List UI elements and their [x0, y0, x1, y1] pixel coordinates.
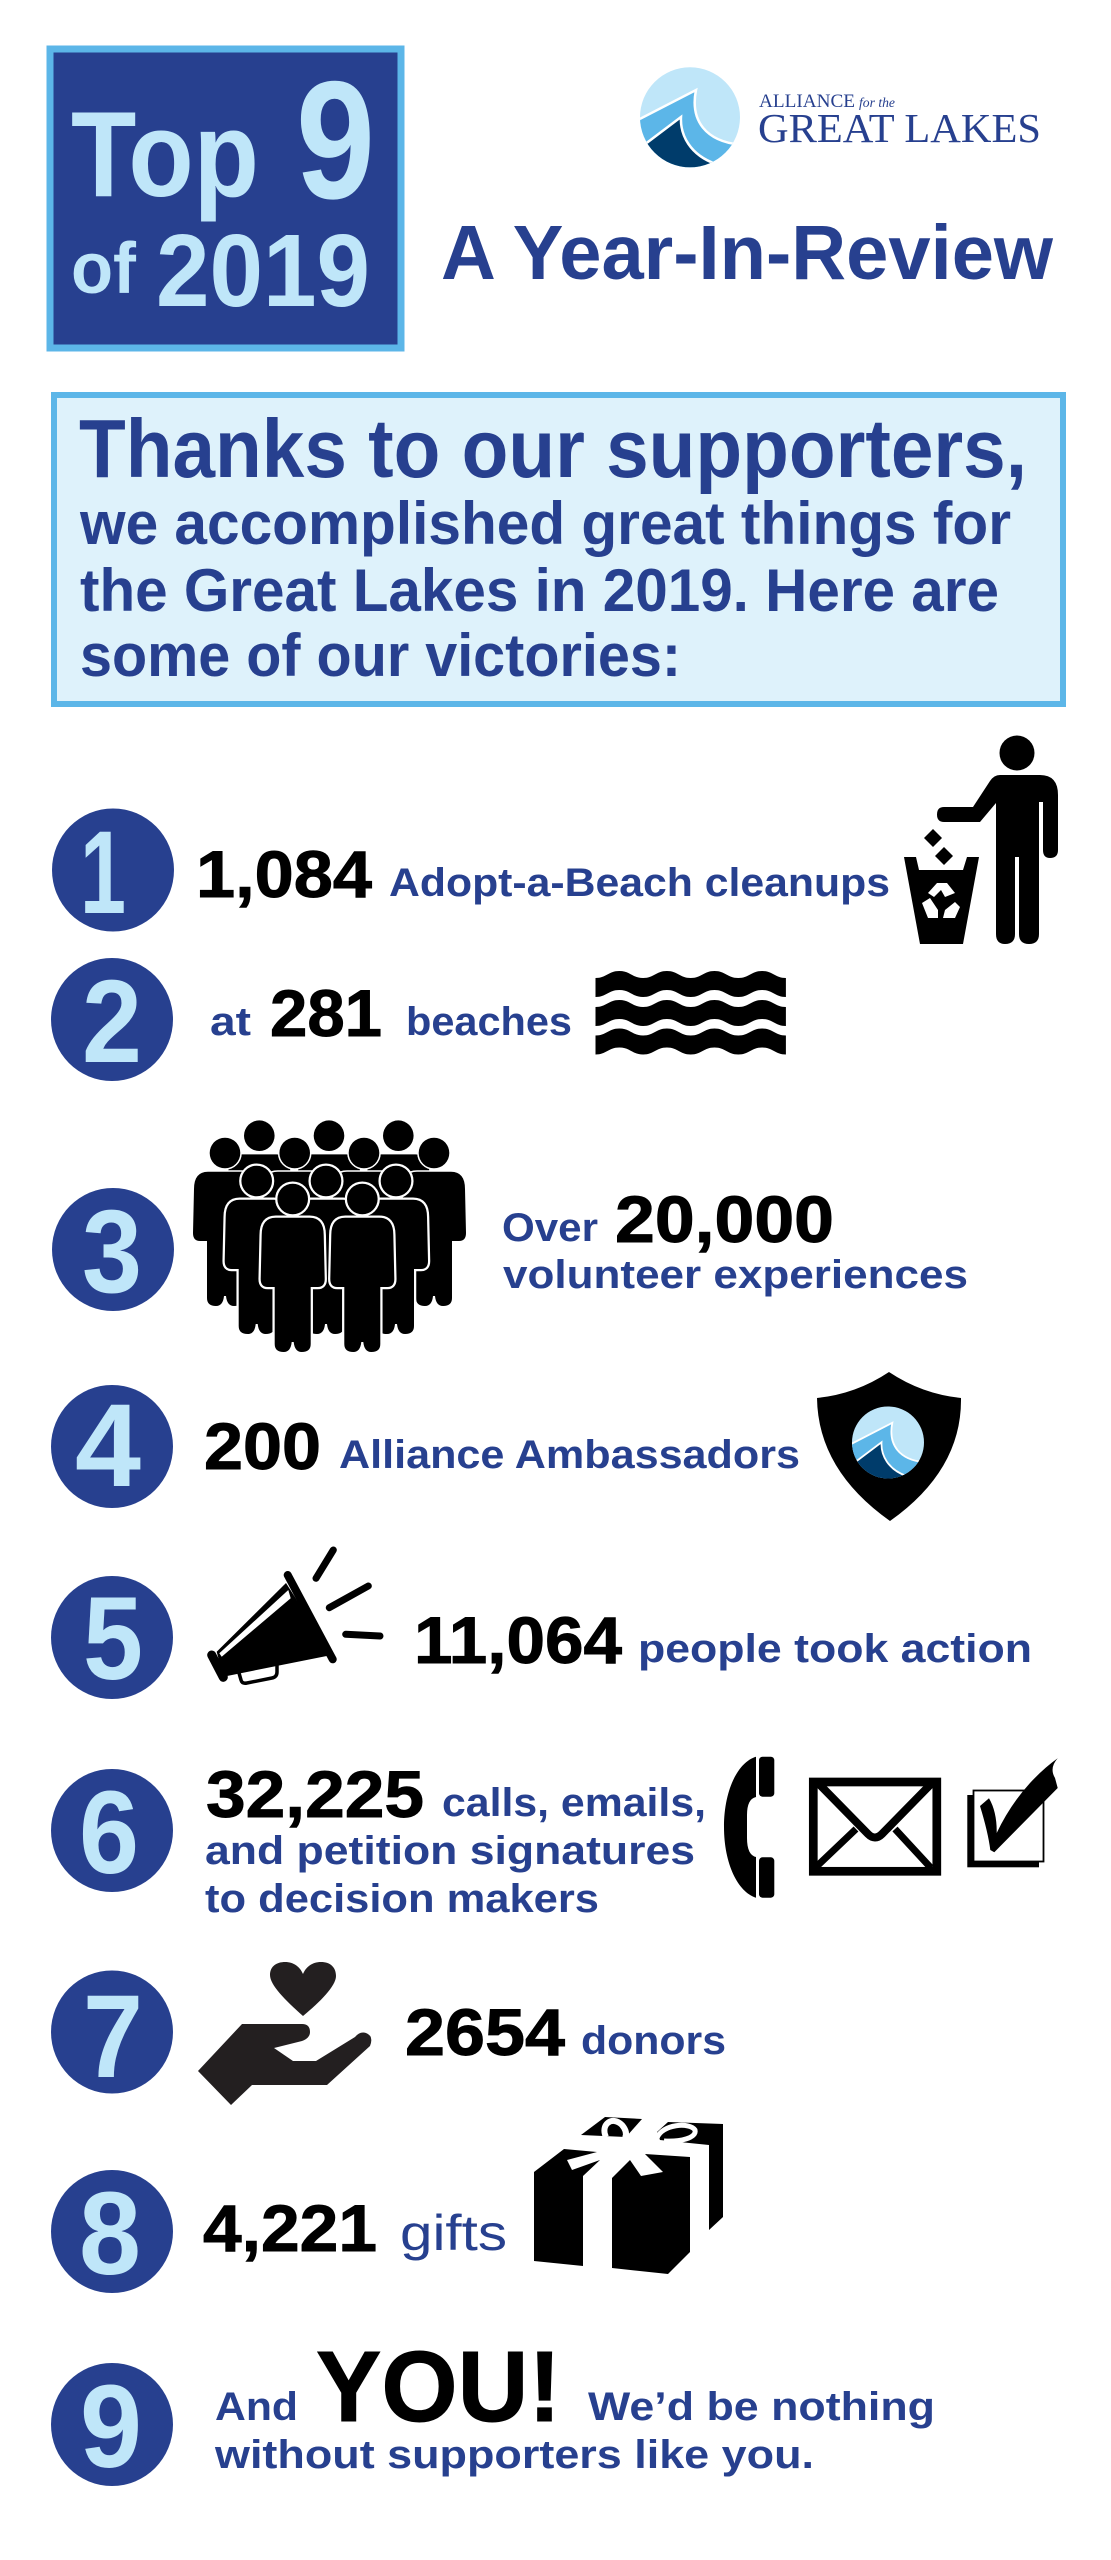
- item 8 text: 4,221 gifts: 4,221: [203, 2191, 377, 2265]
- item 4 badge: 4: [75, 1380, 141, 1512]
- item 3 text: Over 20,000 volunteer experiences: 20,000: [615, 1182, 834, 1256]
- icon: hand holding heart: [198, 1962, 371, 2105]
- item 9 badge: 9: [80, 2361, 142, 2493]
- item 2 badge: [51, 956, 173, 1088]
- item 3 badge: 3: [82, 1186, 142, 1318]
- item 9 text: And YOU! We'd be nothing without supporters like you.: [214, 2331, 935, 2477]
- item 8 text: 4,221 gifts: [203, 2191, 507, 2265]
- item 1 badge: 1: [80, 807, 126, 939]
- item 9 text: And YOU! We'd be nothing without supporters like you.: We’d be nothing: [588, 2385, 935, 2429]
- item 7 badge: 7: [83, 1971, 143, 2103]
- item 2 badge: 2: [82, 956, 142, 1088]
- panel: thanks to our supporters: we accomplished great things for: [79, 490, 1011, 557]
- item 5 badge: [51, 1573, 173, 1705]
- item 3 badge: [52, 1186, 174, 1318]
- item 9 text: And YOU! We'd be nothing without supporters like you.: without supporters like you.: [214, 2433, 814, 2477]
- item 4 text: 200 Alliance Ambassadors: 200: [204, 1409, 321, 1483]
- panel: thanks to our supporters: Thanks to our supporters,: [79, 402, 1027, 495]
- icon: group of volunteers: [193, 1120, 466, 1352]
- item 2 text: at 281 beaches: [210, 976, 572, 1050]
- item 6 text: 32,225 calls, emails, and petition signatures to decision makers: [205, 1757, 706, 1921]
- panel: thanks to our supporters: the Great Lakes in 2019. Here are: [80, 557, 999, 624]
- item 6 badge: [51, 1767, 173, 1899]
- item 9 text: And YOU! We'd be nothing without supporters like you.: YOU!: [316, 2331, 561, 2443]
- heading: A Year-In-Review: A Year-In-Review: [441, 210, 1054, 296]
- item 6 badge: 6: [79, 1767, 139, 1899]
- icon: telephone: [724, 1757, 774, 1898]
- item 5 badge: 5: [83, 1573, 143, 1705]
- panel: thanks to our supporters: [54, 395, 1063, 704]
- item 2 text: at 281 beaches: beaches: [406, 1000, 572, 1044]
- item 7 badge: [51, 1970, 173, 2103]
- item 9 badge: [51, 2361, 173, 2493]
- icon: megaphone: [212, 1550, 380, 1683]
- title box: Top 9 of 2019: 9: [296, 46, 375, 234]
- item 5 text: 11,064 people took action: 11,064: [414, 1603, 622, 1677]
- title box: Top 9 of 2019: of: [71, 229, 137, 309]
- item 3 text: Over 20,000 volunteer experiences: [502, 1182, 968, 1297]
- item 1 text: 1,084 Adopt-a-Beach cleanups: 1,084: [196, 837, 372, 911]
- item 7 text: 2654 donors: donors: [581, 2019, 726, 2063]
- item 1 badge: [52, 807, 174, 939]
- item 6 text: 32,225 calls, emails, and petition signatures to decision makers: 32,225: [206, 1757, 424, 1831]
- item 6 text: 32,225 calls, emails, and petition signatures to decision makers: and petition signatures: [205, 1829, 695, 1873]
- item 7 text: 2654 donors: [405, 1995, 726, 2069]
- item 8 badge: 8: [79, 2168, 141, 2300]
- title box: Top 9 of 2019: 2019: [156, 213, 370, 328]
- item 4 text: 200 Alliance Ambassadors: [204, 1409, 800, 1483]
- icon: ambassador shield: [817, 1372, 961, 1521]
- panel: thanks to our supporters: some of our victories:: [80, 622, 681, 689]
- item 9 text: And YOU! We'd be nothing without supporters like you.: And: [215, 2385, 298, 2429]
- icon: waves: [596, 971, 786, 1054]
- title box: Top 9 of 2019: [50, 46, 401, 348]
- item 4 text: 200 Alliance Ambassadors: Alliance Ambassadors: [339, 1433, 800, 1477]
- logo: Alliance for the Great Lakes: GREAT LAKES: [758, 105, 1041, 151]
- icon: envelope: [813, 1782, 937, 1871]
- item 3 text: Over 20,000 volunteer experiences: Over: [502, 1206, 598, 1250]
- item 1 text: 1,084 Adopt-a-Beach cleanups: Adopt-a-Beach cleanups: [389, 861, 890, 905]
- icon: person recycling litter: [904, 736, 1058, 944]
- item 5 text: 11,064 people took action: people took action: [638, 1627, 1032, 1671]
- icon: gift box: [534, 2117, 723, 2274]
- item 1 text: 1,084 Adopt-a-Beach cleanups: [196, 837, 890, 911]
- logo: Alliance for the Great Lakes: for the: [859, 96, 895, 111]
- item 2 text: at 281 beaches: 281: [270, 976, 382, 1050]
- item 3 text: Over 20,000 volunteer experiences: volunteer experiences: [503, 1253, 968, 1297]
- icon: checkbox: [967, 1758, 1058, 1867]
- item 5 text: 11,064 people took action: [414, 1603, 1032, 1677]
- item 8 text: 4,221 gifts: gifts: [400, 2205, 507, 2261]
- logo: Alliance for the Great Lakes: ALLIANCE: [759, 91, 855, 112]
- item 2 text: at 281 beaches: at: [210, 1000, 251, 1044]
- item 8 badge: [51, 2168, 173, 2300]
- title box: Top 9 of 2019: Top: [71, 86, 259, 222]
- item 6 text: 32,225 calls, emails, and petition signatures to decision makers: to decision makers: [205, 1877, 599, 1921]
- logo: Alliance for the Great Lakes: [630, 67, 1041, 185]
- item 6 text: 32,225 calls, emails, and petition signatures to decision makers: calls, emails,: [442, 1781, 706, 1825]
- item 4 badge: [51, 1380, 173, 1512]
- item 7 text: 2654 donors: 2654: [405, 1995, 565, 2069]
